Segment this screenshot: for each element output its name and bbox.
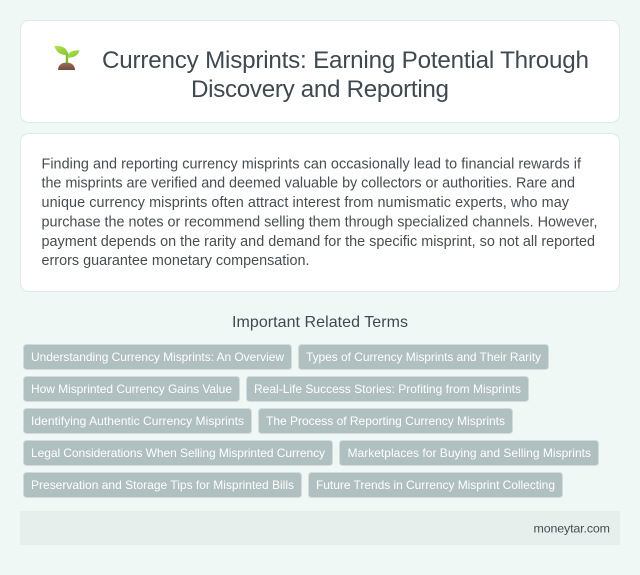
tag: real-life success stories [246, 376, 528, 402]
footer [20, 511, 620, 545]
tag: how misprinted currency gains value [24, 376, 240, 402]
panel: title header [20, 20, 620, 122]
tag: legal considerations [24, 440, 332, 466]
tag: marketplaces: Marketplaces for Buying and Selling Misprints [348, 446, 591, 460]
tag: preservation and storage: Preservation and Storage Tips for Misprinted Bills [31, 478, 294, 492]
tag: identifying authentic misprints: Identifying Authentic Currency Misprints [31, 414, 244, 428]
panel: description [20, 134, 620, 292]
panel: related term tags [24, 344, 598, 498]
text block: paragraph [42, 156, 598, 269]
tag: preservation and storage [24, 472, 302, 498]
tag: understanding currency misprints: Understanding Currency Misprints: An Overview [31, 350, 284, 364]
tag: how misprinted currency gains value: How Misprinted Currency Gains Value [31, 382, 232, 396]
text block: paragraph: the misprints are verified and deemed valuable by collectors or authorities. Rare and [42, 176, 575, 192]
footer source text: moneytar.com [534, 521, 610, 535]
heading: title: Discovery and Reporting [191, 76, 449, 103]
text block: paragraph: errors guarantee monetary compensation. [42, 253, 310, 269]
tag: understanding currency misprints [24, 344, 292, 370]
tag: types of currency misprints: Types of Currency Misprints and Their Rarity [306, 350, 541, 364]
text block: paragraph: payment depends on the rarity and demand for the specific misprint, so not all reported [42, 234, 595, 250]
icon: seedling [54, 46, 80, 70]
tag: legal considerations: Legal Considerations When Selling Misprinted Currency [31, 446, 325, 460]
text block: paragraph: unique currency misprints often attract interest from numismatic experts, who may [42, 195, 570, 211]
heading: title: Currency Misprints: Earning Potential Through [102, 47, 589, 74]
tag: types of currency misprints [298, 344, 548, 370]
tag: identifying authentic misprints [24, 408, 252, 434]
text block: paragraph: Finding and reporting currency misprints can occasionally lead to financial rewards if [42, 156, 582, 172]
tag: marketplaces [340, 440, 598, 466]
tag: future trends: Future Trends in Currency Misprint Collecting [316, 478, 555, 492]
tag: future trends [308, 472, 562, 498]
tag: process of reporting [258, 408, 512, 434]
tag: real-life success stories: Real-Life Success Stories: Profiting from Misprints [254, 382, 521, 396]
heading: title [102, 47, 589, 103]
tag: process of reporting: The Process of Reporting Currency Misprints [266, 414, 505, 428]
text block: paragraph: purchase the notes or recommend selling them through specialized channels. However, [42, 214, 598, 230]
heading: important related terms: Important Related Terms [232, 314, 408, 331]
